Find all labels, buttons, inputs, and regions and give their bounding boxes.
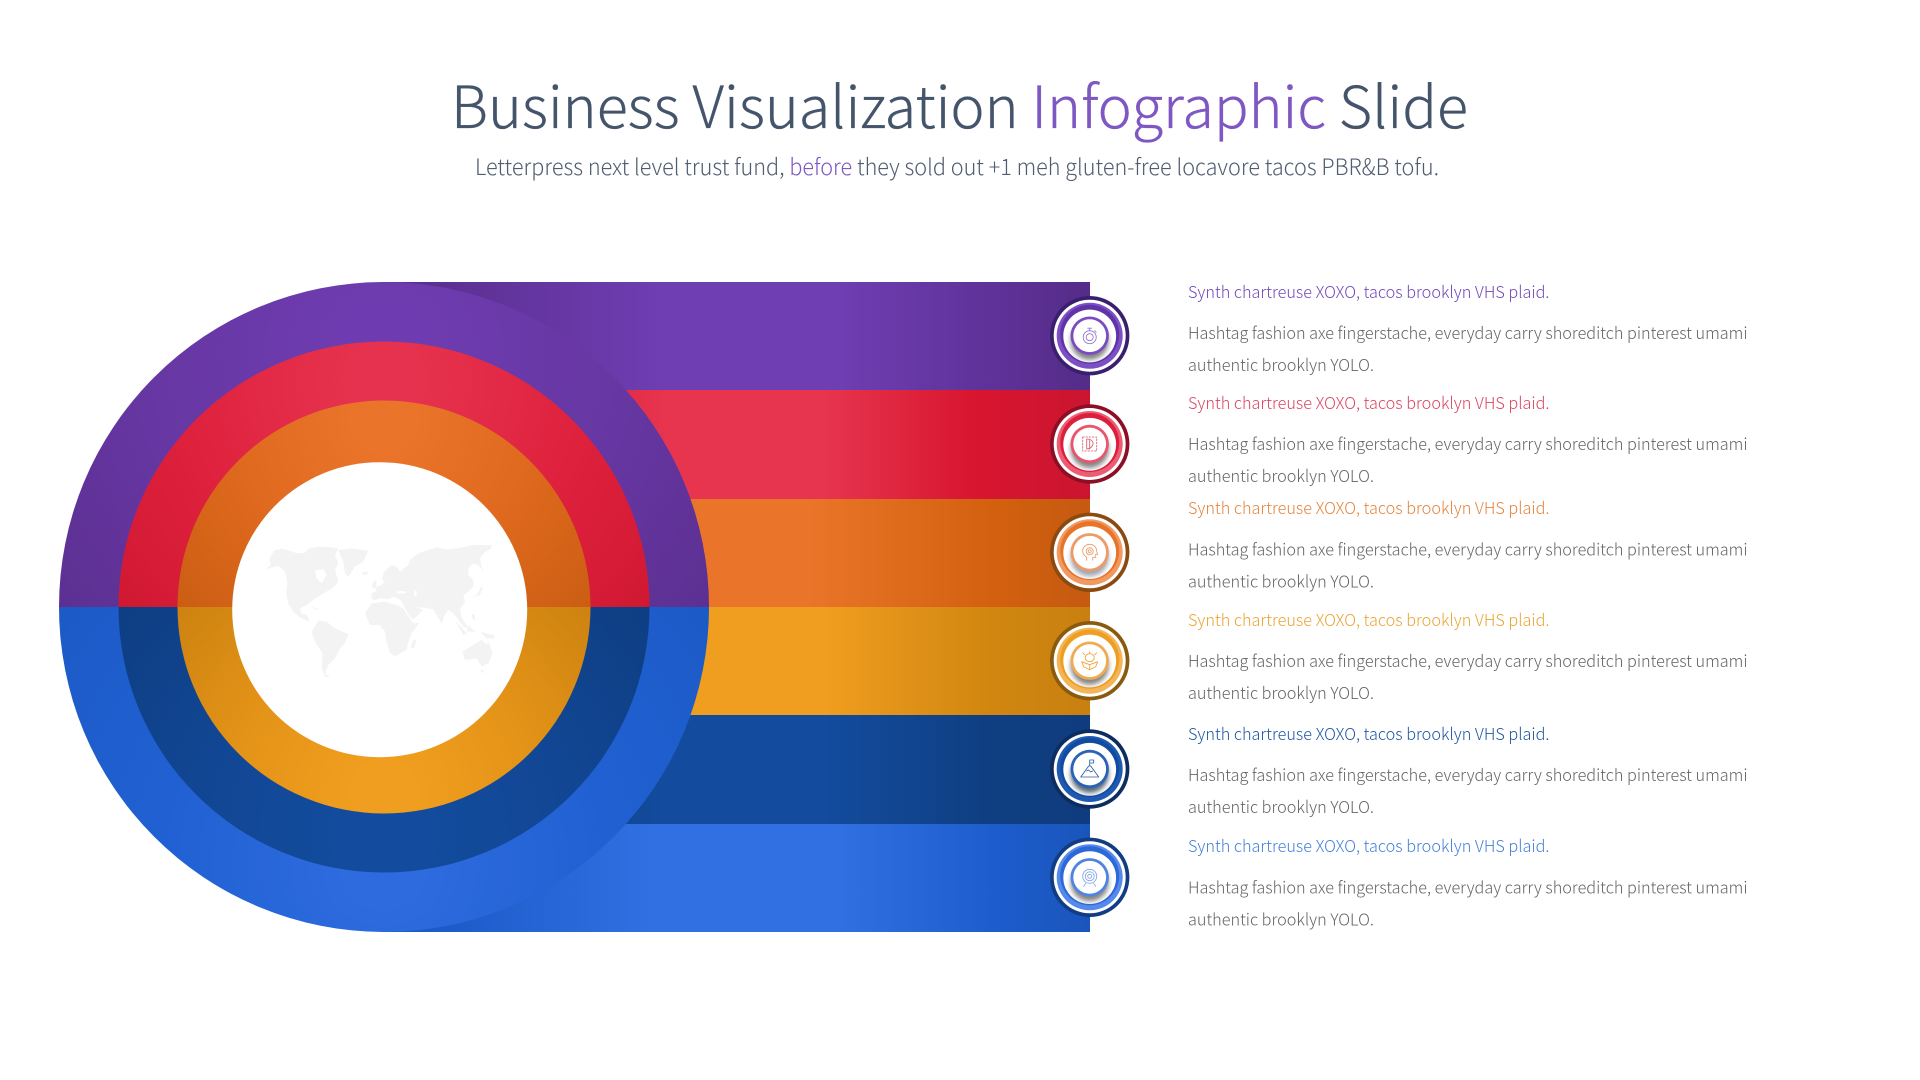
body 3: Hashtag fashion axe fingerstache, everyday carry shoreditch pinterest umami	[1188, 536, 1748, 560]
heading 1: Synth chartreuse XOXO, tacos brooklyn VHS plaid.	[1188, 279, 1550, 303]
body 1	[1188, 320, 1748, 376]
body 1: Hashtag fashion axe fingerstache, everyday carry shoreditch pinterest umami	[1188, 320, 1748, 344]
heading 6: Synth chartreuse XOXO, tacos brooklyn VHS plaid.	[1188, 833, 1550, 857]
text block 4	[1188, 607, 1748, 704]
badge: brain box	[1050, 621, 1129, 700]
body 2	[1188, 431, 1748, 487]
badge: head	[1050, 513, 1129, 592]
badge: target	[1050, 838, 1129, 917]
white centre circle	[232, 462, 527, 757]
ring: yellow bottom half	[178, 607, 590, 814]
bar: orange	[384, 499, 1090, 608]
body 3	[1188, 536, 1748, 592]
body 4: Hashtag fashion axe fingerstache, everyday carry shoreditch pinterest umami	[1188, 648, 1748, 672]
body 1: authentic brooklyn YOLO.	[1188, 352, 1374, 376]
text block 3	[1188, 495, 1748, 592]
icon: focus frame	[1083, 437, 1097, 451]
heading 4: Synth chartreuse XOXO, tacos brooklyn VHS plaid.	[1188, 607, 1550, 631]
concentric half rings	[59, 282, 709, 932]
ring: purple top half	[59, 282, 709, 607]
body 6	[1188, 874, 1748, 930]
icon: stopwatch	[1083, 328, 1096, 344]
icon: target	[1083, 869, 1097, 886]
text block 2	[1188, 390, 1748, 487]
bar: purple	[384, 282, 1090, 390]
ring: orange top half	[178, 401, 590, 607]
ring: navy bottom half	[118, 607, 650, 872]
bar: navy	[384, 715, 1090, 824]
badge: focus frame	[1050, 404, 1129, 484]
body 5: authentic brooklyn YOLO.	[1188, 794, 1374, 818]
heading 5: Synth chartreuse XOXO, tacos brooklyn VHS plaid.	[1188, 721, 1550, 745]
icon: mountain flag	[1081, 760, 1099, 777]
title: Business Visualization Infographic Slide	[451, 61, 1468, 145]
text block 1	[1188, 279, 1748, 376]
body 4	[1188, 648, 1748, 704]
heading 3: Synth chartreuse XOXO, tacos brooklyn VHS plaid.	[1188, 495, 1550, 519]
body 6: Hashtag fashion axe fingerstache, everyday carry shoreditch pinterest umami	[1188, 874, 1748, 898]
ring: red top half	[118, 341, 650, 607]
heading 2: Synth chartreuse XOXO, tacos brooklyn VHS plaid.	[1188, 390, 1550, 414]
bar: red	[384, 390, 1090, 499]
subtitle: Letterpress next level trust fund, before they sold out +1 meh gluten-free locavore tacos PBR&B tofu.	[475, 150, 1439, 182]
icon: head	[1083, 544, 1098, 560]
bar: yellow	[384, 607, 1090, 716]
badge: mountain flag	[1050, 729, 1129, 809]
body 5	[1188, 762, 1748, 818]
text block 6	[1188, 833, 1748, 930]
body 3: authentic brooklyn YOLO.	[1188, 568, 1374, 592]
text block 5	[1188, 721, 1748, 818]
badge: stopwatch	[1050, 296, 1129, 375]
body 4: authentic brooklyn YOLO.	[1188, 680, 1374, 704]
ring: blue bottom half	[59, 607, 709, 932]
world map	[265, 545, 495, 677]
icon: brain box	[1082, 652, 1098, 670]
body 2: Hashtag fashion axe fingerstache, everyday carry shoreditch pinterest umami	[1188, 431, 1748, 455]
bar: blue	[384, 824, 1090, 932]
body 6: authentic brooklyn YOLO.	[1188, 906, 1374, 930]
bar stack	[384, 282, 1090, 932]
body 2: authentic brooklyn YOLO.	[1188, 463, 1374, 487]
body 5: Hashtag fashion axe fingerstache, everyday carry shoreditch pinterest umami	[1188, 762, 1748, 786]
